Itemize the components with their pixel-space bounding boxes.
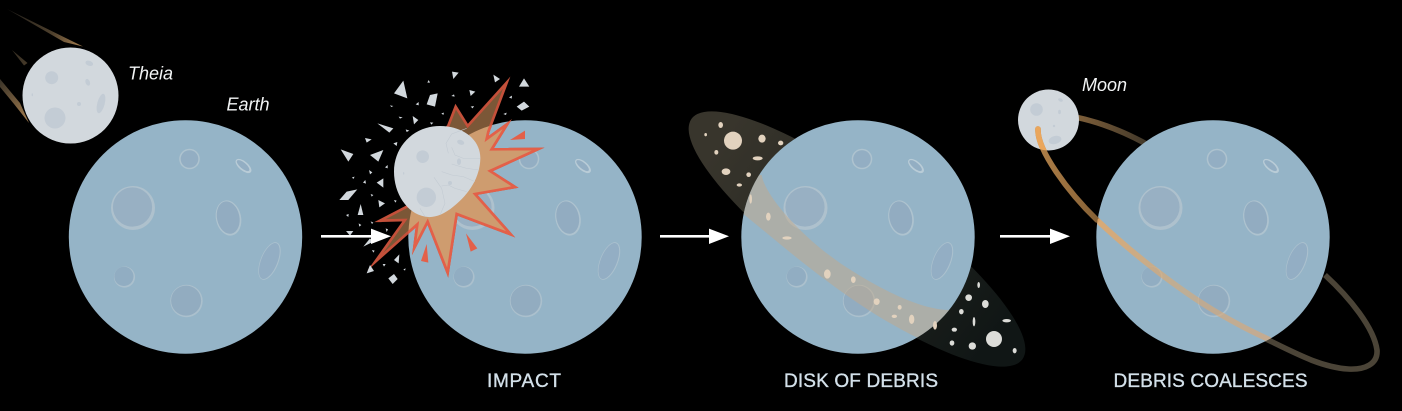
arrow 3 [1000, 229, 1070, 244]
explosion star, dark part over space [375, 83, 538, 273]
debris particles [704, 122, 937, 330]
planet: Earth, panel 3 [741, 120, 975, 354]
caption: DISK OF DEBRIS: DISK OF DEBRIS [784, 371, 938, 392]
deformed Theia [394, 126, 480, 217]
Theia cracks [420, 128, 480, 217]
arrow 1 [321, 229, 391, 244]
orbit ring, behind Earth [1075, 117, 1377, 369]
explosion impact [339, 72, 538, 284]
debris disk, back [660, 76, 1054, 402]
explosion star, part over Earth [408, 121, 544, 278]
label: Theia: Theia [128, 64, 173, 84]
debris disk, front [704, 122, 1017, 353]
planet: Earth, panel 1 [69, 120, 302, 354]
planet: Earth, panel 4 [1096, 120, 1330, 354]
planet: Moon [1018, 90, 1079, 150]
rock shards [339, 72, 529, 284]
arrow 2 [660, 229, 729, 244]
planet: Theia [22, 48, 118, 144]
caption: DEBRIS COALESCES: DEBRIS COALESCES [1114, 371, 1308, 392]
label: Earth: Earth [226, 95, 270, 115]
orbit ring, in front [1038, 129, 1270, 340]
Theia craters [403, 139, 465, 207]
Theia motion trails [0, 9, 83, 123]
label: Moon: Moon [1082, 75, 1127, 95]
planet: Earth, panel 2 [408, 120, 642, 354]
caption: IMPACT: IMPACT [487, 371, 561, 392]
translucent band over Earth [742, 175, 950, 340]
red fragments [421, 131, 525, 263]
